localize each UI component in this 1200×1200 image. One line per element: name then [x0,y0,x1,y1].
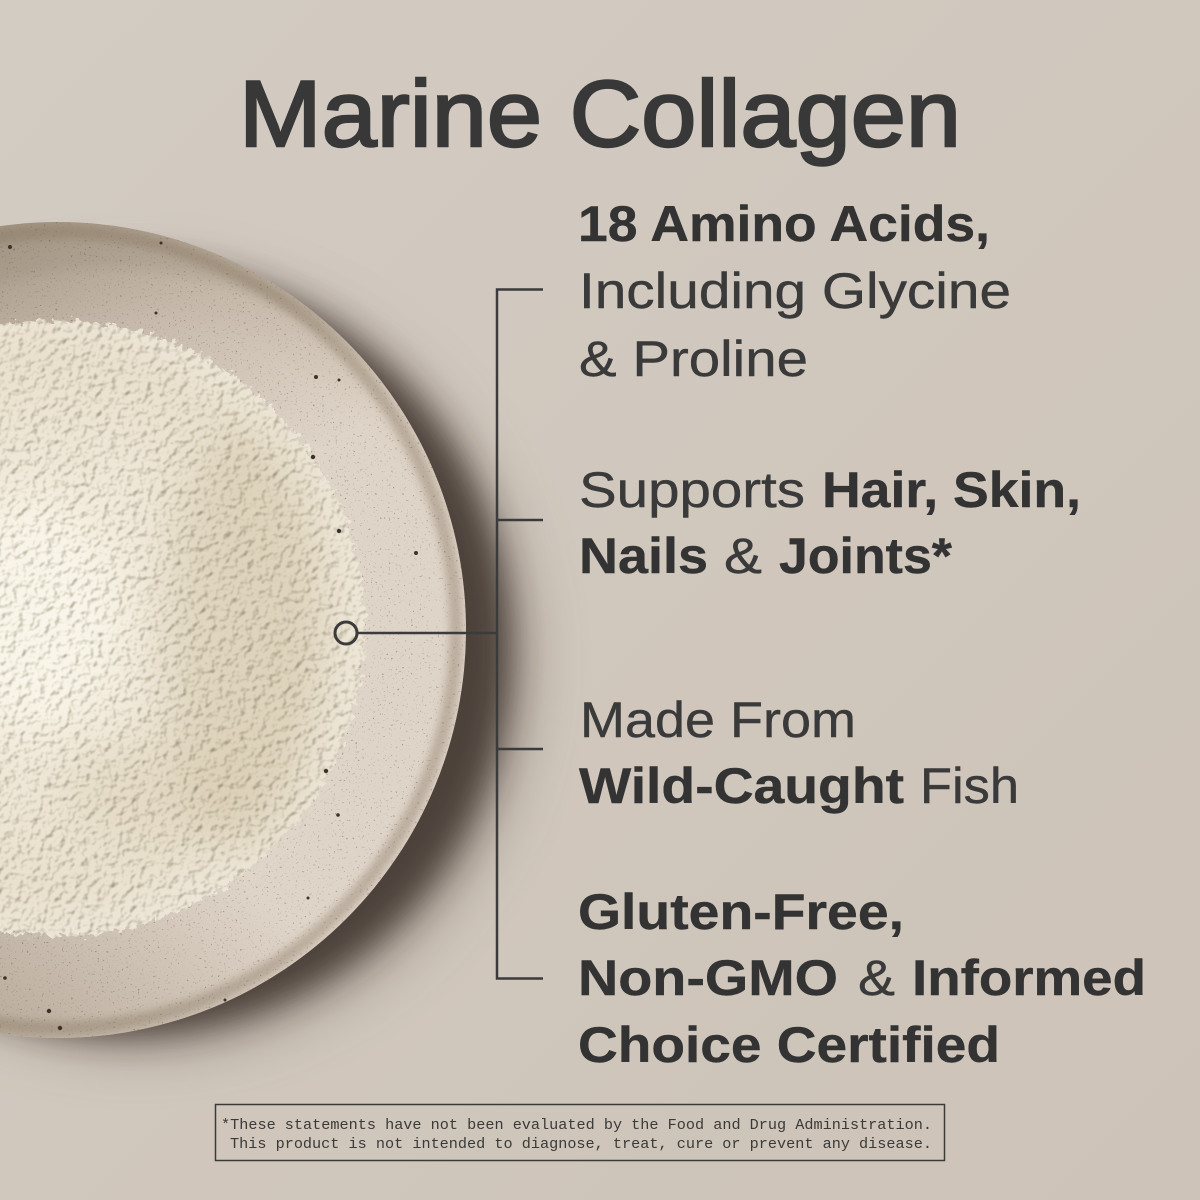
text block: certifications: Gluten-Free, [578,884,904,940]
text block: hair skin nails joints: Nails [579,528,708,584]
bracket connector [335,290,543,978]
text block: wild-caught fish: Fish [920,758,1019,814]
text block: amino acids: Including Glycine [579,263,1011,319]
text block: hair skin nails joints: & [724,528,762,584]
marker circle [335,622,357,644]
title: Marine Collagen [239,61,961,166]
plate shadow [0,265,525,1045]
text block: hair skin nails joints: Hair, Skin, [822,462,1081,518]
text block: amino acids [578,196,1011,387]
text block: hair skin nails joints: Supports [579,462,805,518]
plate with powder [0,222,470,1038]
text block: wild-caught fish: Made From [580,692,856,748]
disclaimer box: *These statements have not been evaluated by the Food and Drug Administration. [221,1117,932,1134]
text block: wild-caught fish: Wild-Caught [579,758,904,814]
text block: certifications [578,884,1146,1073]
text block: hair skin nails joints [579,462,1081,584]
text block: amino acids: 18 Amino Acids, [578,196,990,252]
ceramic plate [0,222,470,1038]
text block: hair skin nails joints: Joints* [779,528,953,584]
text block: certifications: Informed [912,950,1146,1006]
text block: wild-caught fish [579,692,1019,814]
disclaimer box [216,1104,944,1160]
text block: certifications: Non-GMO [578,950,838,1006]
text block: certifications: Choice Certified [578,1017,1000,1073]
powder mound [0,320,365,936]
text block: certifications: & [858,950,895,1006]
disclaimer box: This product is not intended to diagnose, treat, cure or prevent any disease. [230,1136,932,1153]
text block: amino acids: & Proline [579,331,808,387]
dark speckles [3,242,418,1030]
